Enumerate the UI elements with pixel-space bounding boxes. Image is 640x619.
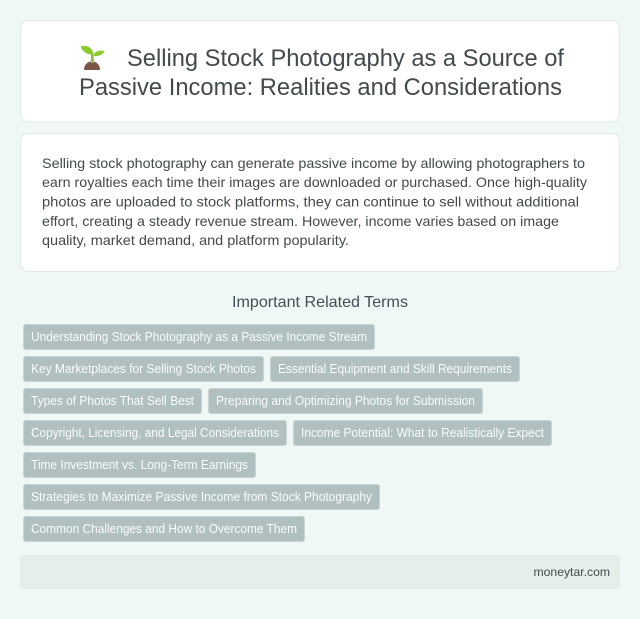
tag: copyright and licensing [24,420,286,446]
tag: common challenges: Common Challenges and How to Overcome Them [31,522,297,536]
summary text: effort, creating a steady revenue stream. However, income varies based on image [42,213,559,229]
heading: important related terms: Important Related Terms [232,294,408,311]
tag: strategies: Strategies to Maximize Passive Income from Stock Photography [31,490,373,504]
tag: strategies [24,484,380,510]
panel: title card [20,20,620,122]
tag: key marketplaces: Key Marketplaces for Selling Stock Photos [31,362,256,376]
tag: understanding stock photography: Understanding Stock Photography as a Passive Income Stream [31,330,367,344]
summary text [42,155,587,248]
icon: sprout [80,46,104,70]
title text [79,45,564,101]
tag: equipment and skills: Essential Equipment and Skill Requirements [278,362,512,376]
tag: income potential: Income Potential: What to Realistically Expect [301,426,545,440]
tag: time investment: Time Investment vs. Long-Term Earnings [31,458,248,472]
tag: preparing and optimizing: Preparing and Optimizing Photos for Submission [216,394,475,408]
summary text: quality, market demand, and platform popularity. [42,232,349,248]
tag: income potential [294,420,552,446]
tag: preparing and optimizing [208,388,482,414]
title text: Selling Stock Photography as a Source of [127,45,564,72]
footer [20,555,620,589]
tag: understanding stock photography [24,324,374,350]
tag: copyright and licensing: Copyright, Licensing, and Legal Considerations [31,426,279,440]
summary text: earn royalties each time their images are downloaded or purchased. Once high-quality [42,174,587,190]
panel: related term tags [24,324,552,542]
title text: Passive Income: Realities and Considerations [79,74,562,101]
tag: time investment [24,452,256,478]
tag: common challenges [24,516,304,542]
tag: key marketplaces [24,356,264,382]
summary text: photos are uploaded to stock platforms, they can continue to sell without additional [42,194,579,210]
tag: equipment and skills [270,356,520,382]
tag: types of photos: Types of Photos That Sell Best [31,394,194,408]
panel: summary card [20,134,620,272]
tag: types of photos [24,388,202,414]
summary text: Selling stock photography can generate passive income by allowing photographers to [42,155,585,171]
footer source text: moneytar.com [534,565,610,579]
